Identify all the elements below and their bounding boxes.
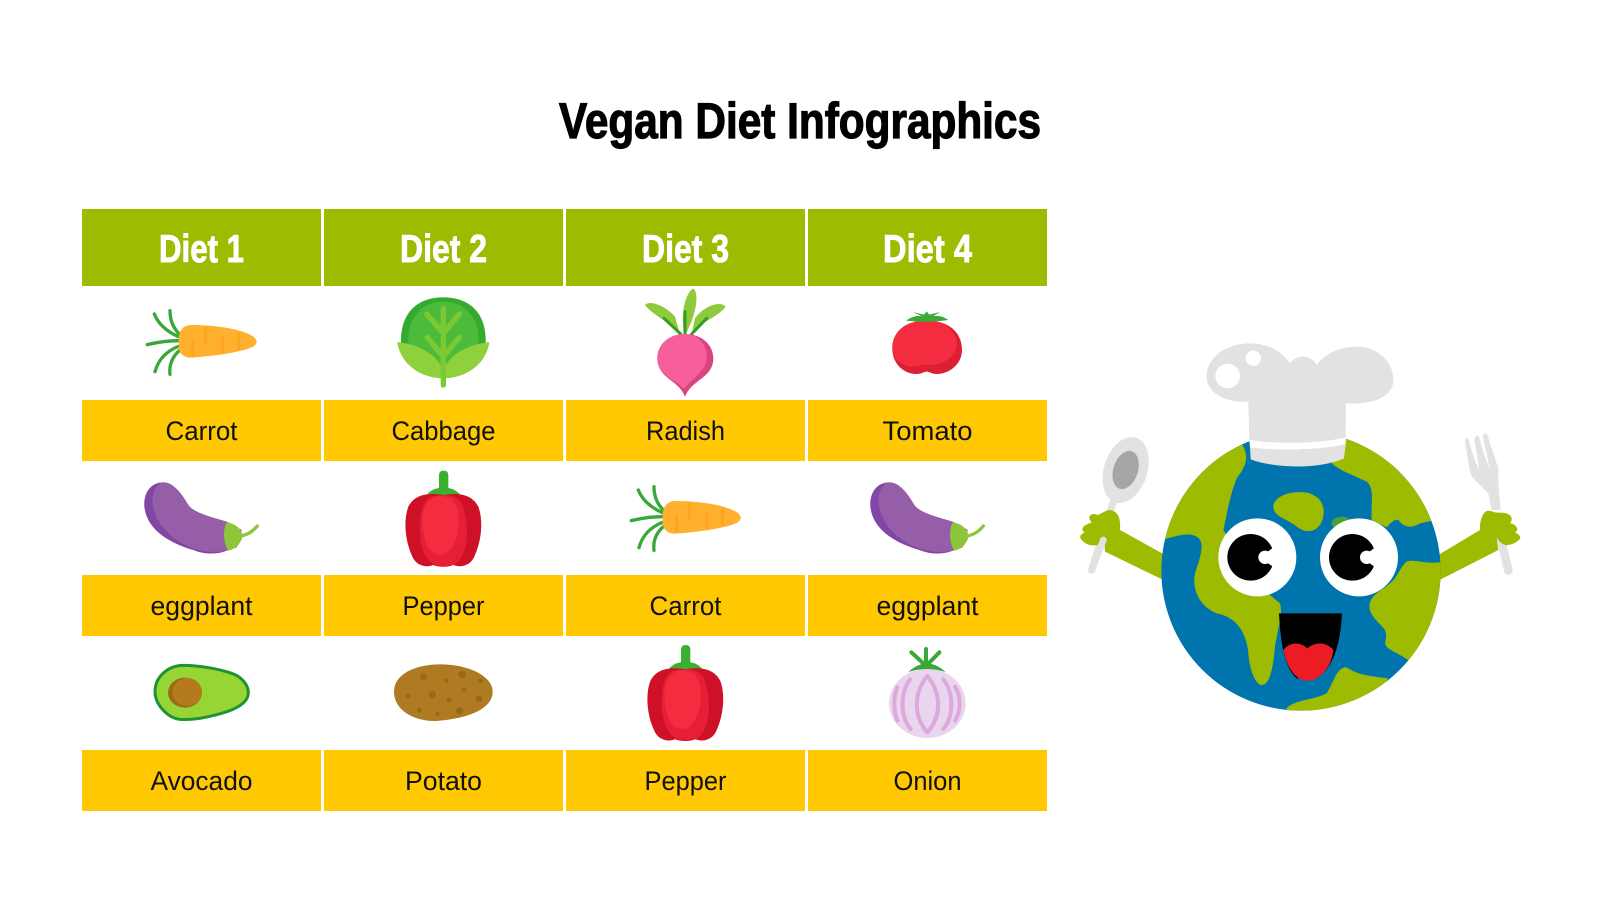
icon: pepper [405, 471, 481, 567]
icon: radish [645, 288, 726, 397]
label: Potato [324, 750, 563, 811]
title: Vegan Diet Infographics [559, 93, 1041, 149]
label: eggplant [82, 575, 321, 636]
icon: cabbage [397, 297, 489, 385]
icon: avocado [155, 665, 248, 719]
header: Diet 1: Diet 1 [159, 228, 244, 271]
right arm [1438, 511, 1520, 581]
left arm [1080, 510, 1163, 580]
icon: eggplant [144, 482, 257, 554]
label row 3 [82, 750, 1047, 811]
right eye [1320, 518, 1398, 596]
label: Carrot [82, 400, 321, 461]
label: Pepper: Pepper [644, 766, 727, 796]
label: Radish: Radish [646, 416, 725, 446]
label: eggplant: eggplant [876, 591, 979, 621]
illustration: globe chef mascot [1080, 343, 1520, 720]
label: Cabbage [324, 400, 563, 461]
header: Diet 1 [82, 209, 321, 286]
globe [1161, 438, 1441, 711]
label: Potato: Potato [405, 766, 482, 796]
icon: pepper [647, 645, 723, 741]
label row 1 [82, 400, 1047, 461]
mouth [1279, 613, 1342, 681]
icon: eggplant [870, 482, 983, 554]
label: Avocado: Avocado [150, 766, 252, 796]
icon: onion [889, 649, 966, 738]
label: Onion [808, 750, 1047, 811]
header: Diet 2: Diet 2 [400, 228, 487, 271]
spoon handle over hand [1092, 540, 1103, 570]
header: Diet 4 [808, 209, 1047, 286]
left eye [1218, 518, 1296, 596]
label: Onion: Onion [894, 766, 962, 796]
label: Avocado [82, 750, 321, 811]
label: Carrot: Carrot [166, 416, 238, 446]
header: Diet 2 [324, 209, 563, 286]
label: Radish [566, 400, 805, 461]
label row 2 [82, 575, 1047, 636]
header: Diet 3 [566, 209, 805, 286]
icon: fork [1465, 433, 1508, 571]
header: Diet 3: Diet 3 [642, 228, 729, 271]
header: Diet 4: Diet 4 [883, 228, 972, 271]
table header row [82, 209, 1047, 286]
label: Carrot: Carrot [650, 591, 722, 621]
icon: tomato [892, 311, 962, 374]
label: Carrot [566, 575, 805, 636]
label: Tomato [808, 400, 1047, 461]
chef hat [1207, 343, 1393, 466]
label: Pepper [324, 575, 563, 636]
icon: carrot [631, 487, 741, 550]
icon: spoon [1092, 431, 1157, 570]
label: eggplant: eggplant [150, 591, 253, 621]
label: Pepper: Pepper [402, 591, 485, 621]
label: eggplant [808, 575, 1047, 636]
label: Cabbage: Cabbage [392, 416, 496, 446]
icon: potato [394, 664, 493, 721]
label: Tomato: Tomato [882, 416, 972, 446]
label: Pepper [566, 750, 805, 811]
icon: carrot [147, 311, 257, 374]
